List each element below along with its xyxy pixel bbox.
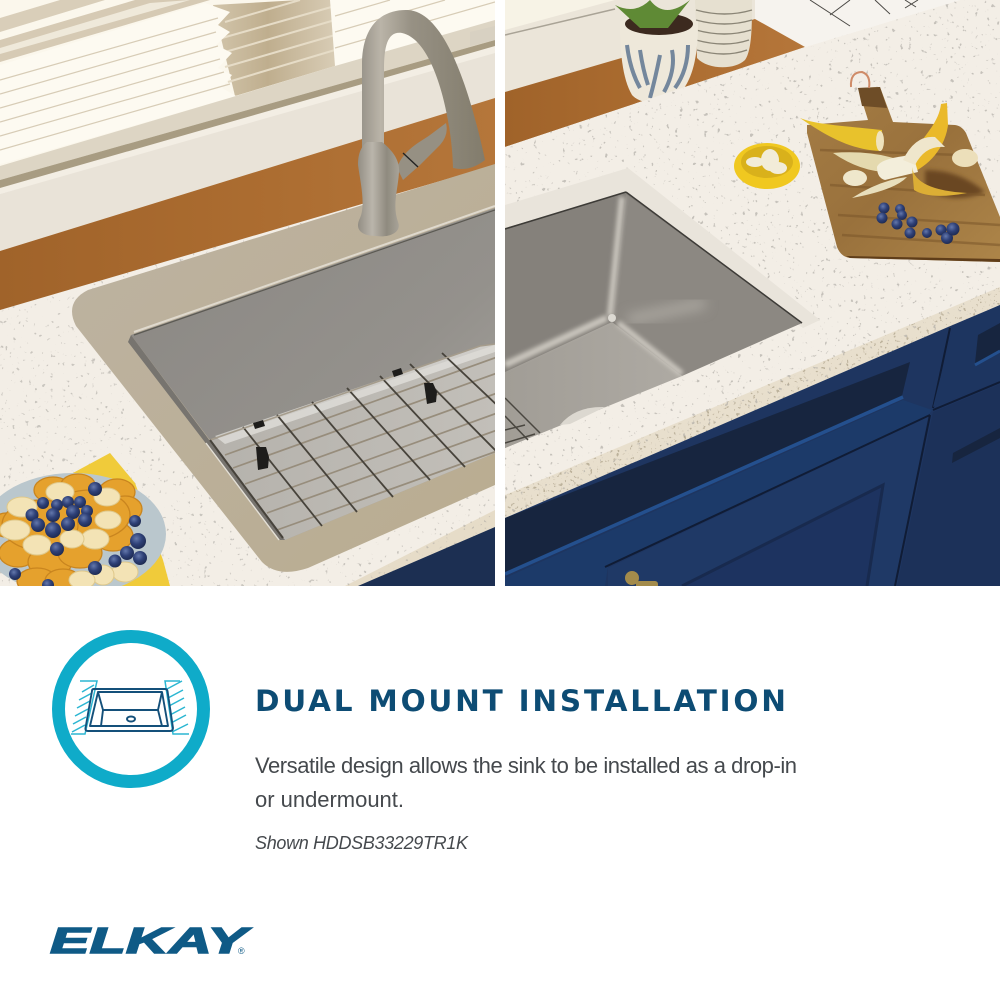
tiled wall (755, 0, 960, 47)
photo: drop-in sink (left panel) (0, 0, 500, 595)
cabinet below counter (358, 527, 495, 586)
sink basin (128, 206, 495, 540)
hatched cut-out walls (71, 681, 189, 734)
sink outline (85, 689, 173, 731)
drain (560, 407, 605, 425)
undermount cut-out bevel (505, 168, 820, 328)
grid rubber feet (253, 368, 437, 470)
yellow bowl with banana slices (734, 143, 800, 189)
cutting board (807, 87, 1000, 262)
striped vase (695, 0, 752, 67)
sink basin (505, 192, 802, 448)
wood ledge (505, 19, 805, 147)
bottom grid (206, 344, 500, 540)
blue cabinet (505, 305, 1000, 586)
countertop (505, 0, 1000, 520)
description text: Versatile design allows the sink to be installed as a drop-in (255, 753, 797, 778)
window sill (0, 26, 495, 251)
plant pot (615, 0, 698, 103)
board hanging loop (851, 72, 869, 88)
wood ledge (0, 98, 495, 311)
faucet (358, 10, 485, 236)
countertop (0, 160, 495, 586)
grid corner (505, 398, 540, 443)
Elkay logo (50, 920, 252, 961)
model note: Shown HDDSB33229TR1K (255, 833, 469, 853)
heading: DUAL MOUNT INSTALLATION (255, 684, 786, 718)
description text: or undermount. (255, 787, 404, 812)
blueberries on board (876, 202, 960, 244)
photo: undermount sink (right panel) (505, 0, 1000, 589)
window and sill (505, 0, 805, 100)
brass knob (625, 571, 658, 586)
window blinds (0, 0, 495, 190)
bananas (800, 103, 978, 198)
plate of waffles, bananas and blueberries (0, 473, 166, 595)
Elkay logo: ® (238, 946, 245, 956)
icon: dual mount sink in circle (58, 636, 204, 782)
Elkay logo: ELKAY (50, 920, 252, 961)
sink flange (72, 164, 495, 572)
napkin (73, 453, 170, 586)
